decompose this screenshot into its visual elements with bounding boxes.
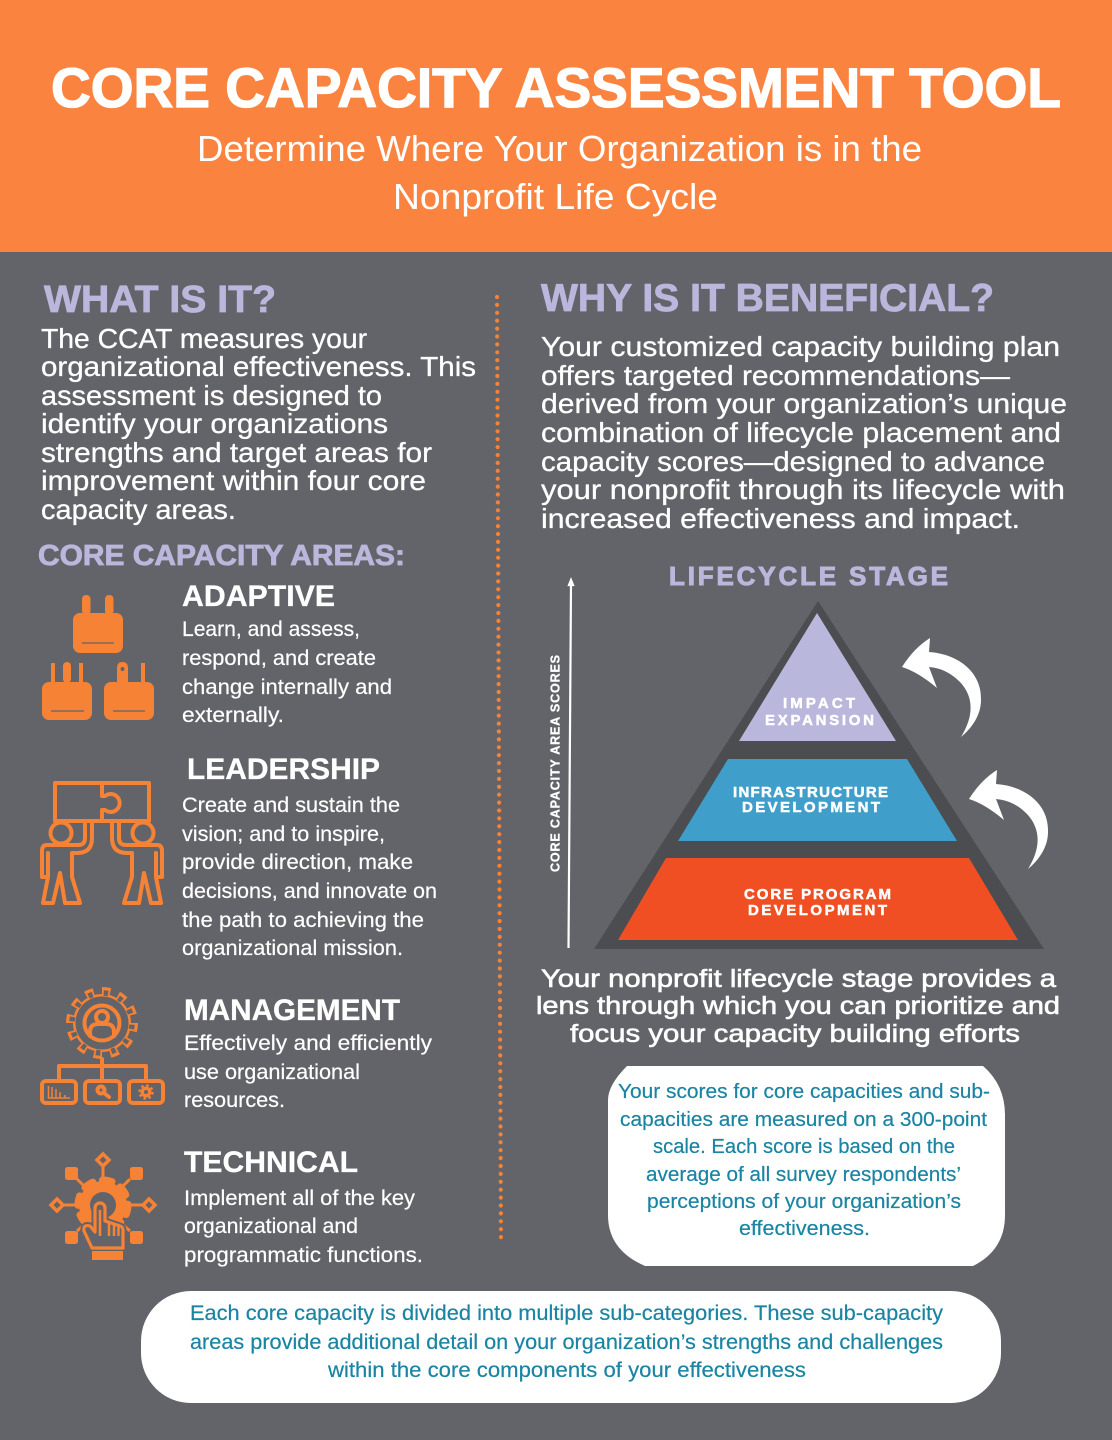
callout: sub-capacity areas: within the core components of your effectiveness bbox=[327, 1359, 806, 1382]
text block: benefits: your nonprofit through its lifecycle with bbox=[541, 474, 1065, 505]
text block: CCAT description: strengths and target areas for bbox=[41, 437, 432, 468]
text: adaptive bbox=[182, 580, 392, 727]
icon: management bbox=[42, 992, 163, 1103]
chart heading: LIFECYCLE STAGE bbox=[669, 561, 948, 591]
text block: lifecycle lens: lens through which you can prioritize and bbox=[536, 992, 1060, 1020]
callout: scoring scale bbox=[608, 1066, 1005, 1266]
text: technical bbox=[184, 1146, 423, 1267]
text: management: resources. bbox=[184, 1088, 285, 1112]
text: adaptive: externally. bbox=[182, 703, 284, 727]
text block: CCAT description: capacity areas. bbox=[41, 494, 236, 525]
arrow: to impact expansion bbox=[902, 638, 981, 737]
callout: sub-capacity areas bbox=[141, 1291, 1001, 1403]
subtitle: Nonprofit Life Cycle bbox=[393, 176, 718, 217]
icon: adaptive bbox=[42, 595, 154, 720]
text: leadership: decisions, and innovate on bbox=[182, 879, 437, 903]
heading: why is it beneficial: WHY IS IT BENEFICIAL? bbox=[541, 277, 994, 320]
text: adaptive: change internally and bbox=[182, 675, 392, 699]
heading: what is it: WHAT IS IT? bbox=[44, 279, 276, 321]
text block: benefits: increased effectiveness and impact. bbox=[541, 503, 1020, 534]
text: adaptive: respond, and create bbox=[182, 646, 376, 670]
text: leadership: organizational mission. bbox=[182, 936, 403, 960]
text block: CCAT description: organizational effectiveness. This bbox=[41, 351, 476, 382]
text: technical: TECHNICAL bbox=[184, 1146, 358, 1179]
chart: lifecycle stage pyramid bbox=[548, 561, 1048, 949]
text: leadership: vision; and to inspire, bbox=[182, 822, 385, 846]
text: management bbox=[184, 994, 432, 1112]
text block: benefits: capacity scores—designed to advance bbox=[541, 446, 1045, 477]
icon: leadership bbox=[42, 783, 162, 903]
text: leadership: the path to achieving the bbox=[182, 908, 424, 932]
text: adaptive: Learn, and assess, bbox=[182, 617, 360, 641]
text: technical: Implement all of the key bbox=[184, 1186, 415, 1210]
text block: lifecycle lens: focus your capacity building efforts bbox=[570, 1020, 1020, 1048]
text: management: MANAGEMENT bbox=[184, 994, 400, 1027]
arrow: to infrastructure development bbox=[969, 770, 1048, 869]
text: technical: programmatic functions. bbox=[184, 1243, 423, 1267]
callout: scoring scale: scale. Each score is based on the bbox=[653, 1136, 955, 1158]
tier: core program development: DEVELOPMENT bbox=[748, 902, 887, 919]
text block: CCAT description: assessment is designed to bbox=[41, 380, 382, 411]
text block: benefits bbox=[541, 331, 1067, 534]
text: leadership: Create and sustain the bbox=[182, 793, 400, 817]
callout: scoring scale: capacities are measured on a 300-point bbox=[620, 1109, 987, 1131]
callout: scoring scale: Your scores for core capacities and sub- bbox=[618, 1081, 990, 1103]
text block: benefits: derived from your organization’s unique bbox=[541, 388, 1067, 419]
subtitle: Determine Where Your Organization is in the bbox=[197, 128, 922, 169]
text block: benefits: Your customized capacity building plan bbox=[541, 331, 1060, 362]
axis label: CORE CAPACITY AREA SCORES bbox=[548, 655, 562, 872]
pyramid outline bbox=[594, 601, 1044, 949]
text: leadership bbox=[182, 753, 437, 960]
text block: benefits: combination of lifecycle placement and bbox=[541, 417, 1061, 448]
text: leadership: provide direction, make bbox=[182, 850, 413, 874]
heading: core capacity areas: CORE CAPACITY AREAS: bbox=[38, 540, 405, 572]
callout: sub-capacity areas: Each core capacity is divided into multiple sub-categories. These sub-capacity bbox=[190, 1302, 944, 1325]
callout: scoring scale: effectiveness. bbox=[739, 1218, 870, 1240]
panel: what is it bbox=[41, 279, 476, 525]
panel: core capacity areas bbox=[38, 540, 437, 1267]
panel: why is it beneficial bbox=[541, 277, 1067, 534]
text block: lifecycle lens bbox=[536, 965, 1060, 1048]
axis arrow bbox=[568, 580, 573, 948]
text: adaptive: ADAPTIVE bbox=[182, 580, 335, 613]
callout: sub-capacity areas: areas provide additional detail on your organization’s strengths and challenges bbox=[190, 1331, 943, 1354]
subtitle bbox=[197, 128, 922, 217]
icon: technical bbox=[51, 1154, 155, 1260]
tier: infrastructure development: DEVELOPMENT bbox=[742, 799, 880, 816]
text block: benefits: offers targeted recommendations— bbox=[541, 360, 1010, 391]
callout: scoring scale: average of all survey respondents’ bbox=[646, 1164, 961, 1186]
text block: lifecycle lens: Your nonprofit lifecycle stage provides a bbox=[541, 965, 1056, 993]
text: technical: organizational and bbox=[184, 1214, 358, 1238]
callout: scoring scale: perceptions of your organization’s bbox=[647, 1191, 961, 1213]
tier: infrastructure development bbox=[678, 759, 957, 841]
text block: CCAT description: identify your organizations bbox=[41, 408, 388, 439]
text: management: use organizational bbox=[184, 1060, 360, 1084]
title: CORE CAPACITY ASSESSMENT TOOL bbox=[51, 56, 1061, 119]
tier: core program development: CORE PROGRAM bbox=[744, 886, 891, 903]
tier: core program development bbox=[618, 858, 1018, 940]
text block: CCAT description: The CCAT measures your bbox=[41, 323, 367, 354]
text block: CCAT description bbox=[41, 323, 476, 525]
tier: impact expansion bbox=[739, 613, 896, 741]
tier: impact expansion: IMPACT bbox=[783, 695, 855, 712]
header band bbox=[0, 0, 1112, 252]
tier: impact expansion: EXPANSION bbox=[765, 712, 874, 729]
text block: CCAT description: improvement within four core bbox=[41, 465, 426, 496]
text: management: Effectively and efficiently bbox=[184, 1031, 432, 1055]
tier: infrastructure development: INFRASTRUCTURE bbox=[733, 784, 888, 801]
text: leadership: LEADERSHIP bbox=[187, 753, 380, 786]
